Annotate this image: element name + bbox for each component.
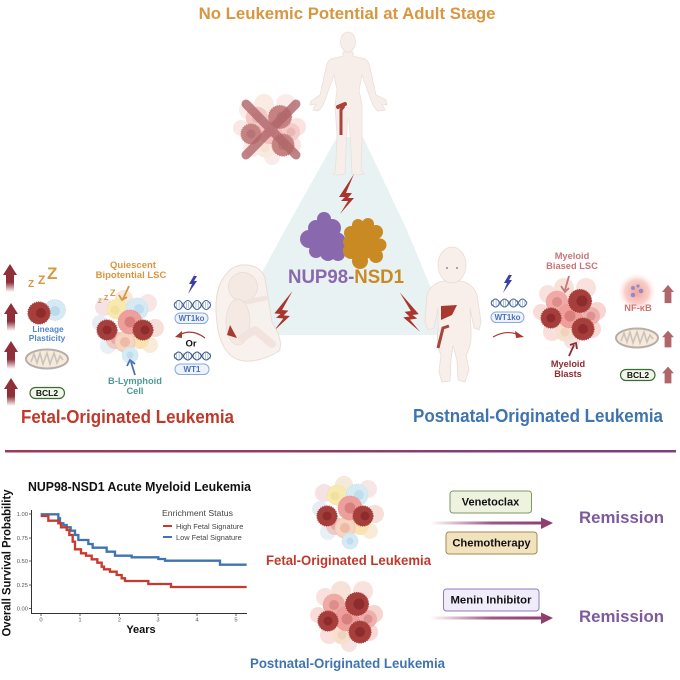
arrow: b-lymphoid pointer — [127, 360, 135, 375]
icon: lightning blue right — [503, 271, 512, 293]
chart: survival curve: 1 — [78, 618, 82, 624]
chart: survival curve: 0.75 — [17, 536, 28, 542]
label: NF-kB: NF-κB — [624, 303, 652, 313]
icon: mitochondrion right — [616, 328, 658, 348]
figure: baby — [425, 247, 481, 382]
icon: cluster zzz: Z — [110, 288, 116, 298]
label: postnatal-originated leukemia: Postnatal-Originated Leukemia — [250, 656, 445, 671]
arrow: fetal therapy — [430, 518, 553, 529]
label: or: Or — [185, 338, 197, 350]
icon: lineage plasticity cells — [28, 300, 66, 324]
label: remission fetal: Remission — [579, 508, 664, 527]
lightning bolt: left — [272, 289, 293, 333]
box: menin inhibitor — [444, 589, 539, 611]
lightning bolt: right — [400, 290, 421, 334]
chart: survival curve: 0.50 — [17, 559, 28, 565]
icon: zzz: Z — [38, 273, 45, 287]
chart title: NUP98-NSD1 Acute Myeloid Leukemia — [28, 479, 252, 494]
icon: DNA wt1 — [174, 352, 211, 360]
chart: survival curve — [17, 510, 247, 624]
figure: adult body — [310, 32, 387, 175]
protein: NUP98-NSD1 — [300, 212, 386, 269]
label: quiescent bipotential LSC: Bipotential LSC — [96, 270, 166, 281]
chart: survival curve: 0.25 — [17, 583, 28, 589]
chart: survival curve: 0 — [39, 618, 43, 624]
icon: right up arrows — [662, 285, 674, 383]
arrow: myeloid blasts pointer — [569, 343, 577, 356]
icon: cluster zzz: Z — [104, 295, 109, 302]
title: no leukemic potential: No Leukemic Potential at Adult Stage — [199, 4, 495, 23]
label: b-lymphoid cell: Cell — [126, 386, 144, 396]
chart legend: Low Fetal Signature — [176, 533, 242, 542]
label: myeloid biased LSC: Myeloid — [555, 251, 590, 261]
arrow: quiescent pointer — [119, 286, 129, 300]
icon: NF-kB glow — [617, 272, 657, 312]
chart legend: High Fetal Signature — [176, 522, 243, 531]
icon: zzz: Z — [28, 279, 34, 290]
chart: survival curve: 2 — [118, 618, 121, 624]
box: venetoclax — [450, 491, 532, 513]
lightning bolt: top — [339, 174, 354, 214]
chart legend: Enrichment Status — [162, 508, 234, 518]
chart: survival curve: 0.00 — [17, 606, 28, 612]
label: quiescent bipotential LSC — [96, 260, 166, 281]
chart: survival curve: 4 — [195, 618, 199, 624]
icon: cluster zzz: Z — [98, 299, 102, 305]
arrow: curved red left — [175, 331, 205, 338]
postnatal cluster — [533, 278, 606, 349]
fetal cluster — [92, 290, 164, 363]
heading: fetal-originated leukemia: Fetal-Originated Leukemia — [21, 407, 235, 427]
fetal cluster therapy — [312, 476, 384, 549]
pill: BCL2 left — [30, 388, 64, 398]
label: remission postnatal: Remission — [579, 607, 664, 626]
crossed-out leukemia cluster — [233, 94, 306, 165]
icon: DNA wt1ko left — [174, 300, 211, 310]
chart: survival curve: 1.00 — [17, 512, 28, 518]
chart: survival curve: 3 — [156, 618, 160, 624]
arrow: curved red right — [493, 331, 524, 338]
pill: WT1ko right — [491, 312, 524, 322]
label: myeloid blasts: Myeloid — [551, 359, 585, 369]
icon: mitochondrion left — [26, 350, 68, 368]
axis label: years: Years — [126, 624, 156, 636]
box: chemotherapy: Chemotherapy — [452, 538, 531, 550]
label: b-lymphoid cell — [108, 376, 162, 396]
icon: zzz — [28, 264, 57, 290]
axis label: overall survival probability: Overall Survival Probability — [2, 489, 14, 636]
label: myeloid biased LSC — [546, 251, 598, 271]
box: menin inhibitor: Menin Inhibitor — [451, 594, 532, 606]
label: quiescent bipotential LSC: Quiescent — [110, 260, 157, 271]
label: lineage plasticity: Lineage — [32, 324, 64, 334]
pill: WT1ko left — [175, 313, 208, 324]
label: lineage plasticity — [29, 324, 66, 343]
pill: WT1: WT1 — [184, 365, 201, 374]
pill: BCL2 right: BCL2 — [627, 370, 649, 380]
pill: WT1ko left: WT1ko — [179, 314, 205, 323]
arrow: postnatal therapy — [430, 612, 553, 624]
protein label: NUP98-NSD1 — [288, 267, 404, 288]
icon: lightning blue left — [188, 272, 197, 294]
pill: WT1 — [175, 364, 209, 374]
heading: postnatal-originated leukemia: Postnatal-Originated Leukemia — [413, 406, 664, 426]
label: myeloid blasts: Blasts — [554, 369, 582, 379]
label: lineage plasticity: Plasticity — [29, 333, 66, 343]
icon: left up arrows — [3, 264, 18, 406]
postnatal cluster therapy — [310, 581, 383, 652]
pill: WT1ko right: WT1ko — [495, 313, 521, 322]
label: fetal-originated leukemia: Fetal-Originated Leukemia — [266, 553, 431, 568]
figure: fetus in egg — [216, 265, 280, 361]
label: b-lymphoid cell: B-Lymphoid — [108, 376, 162, 386]
triangle background — [228, 137, 438, 335]
box: venetoclax: Venetoclax — [462, 496, 520, 508]
chart legend — [162, 508, 243, 542]
box: chemotherapy — [446, 532, 537, 554]
label: myeloid biased LSC: Biased LSC — [546, 261, 598, 271]
icon: DNA wt1ko right — [491, 299, 527, 307]
pill: BCL2 right — [620, 370, 655, 380]
chart: survival curve: 5 — [234, 618, 238, 624]
arrow: myeloid biased pointer — [561, 276, 569, 292]
icon: cluster zzz — [98, 288, 116, 305]
label: myeloid blasts — [551, 359, 585, 379]
icon: zzz: Z — [47, 264, 57, 283]
pill: BCL2 left: BCL2 — [36, 388, 58, 398]
